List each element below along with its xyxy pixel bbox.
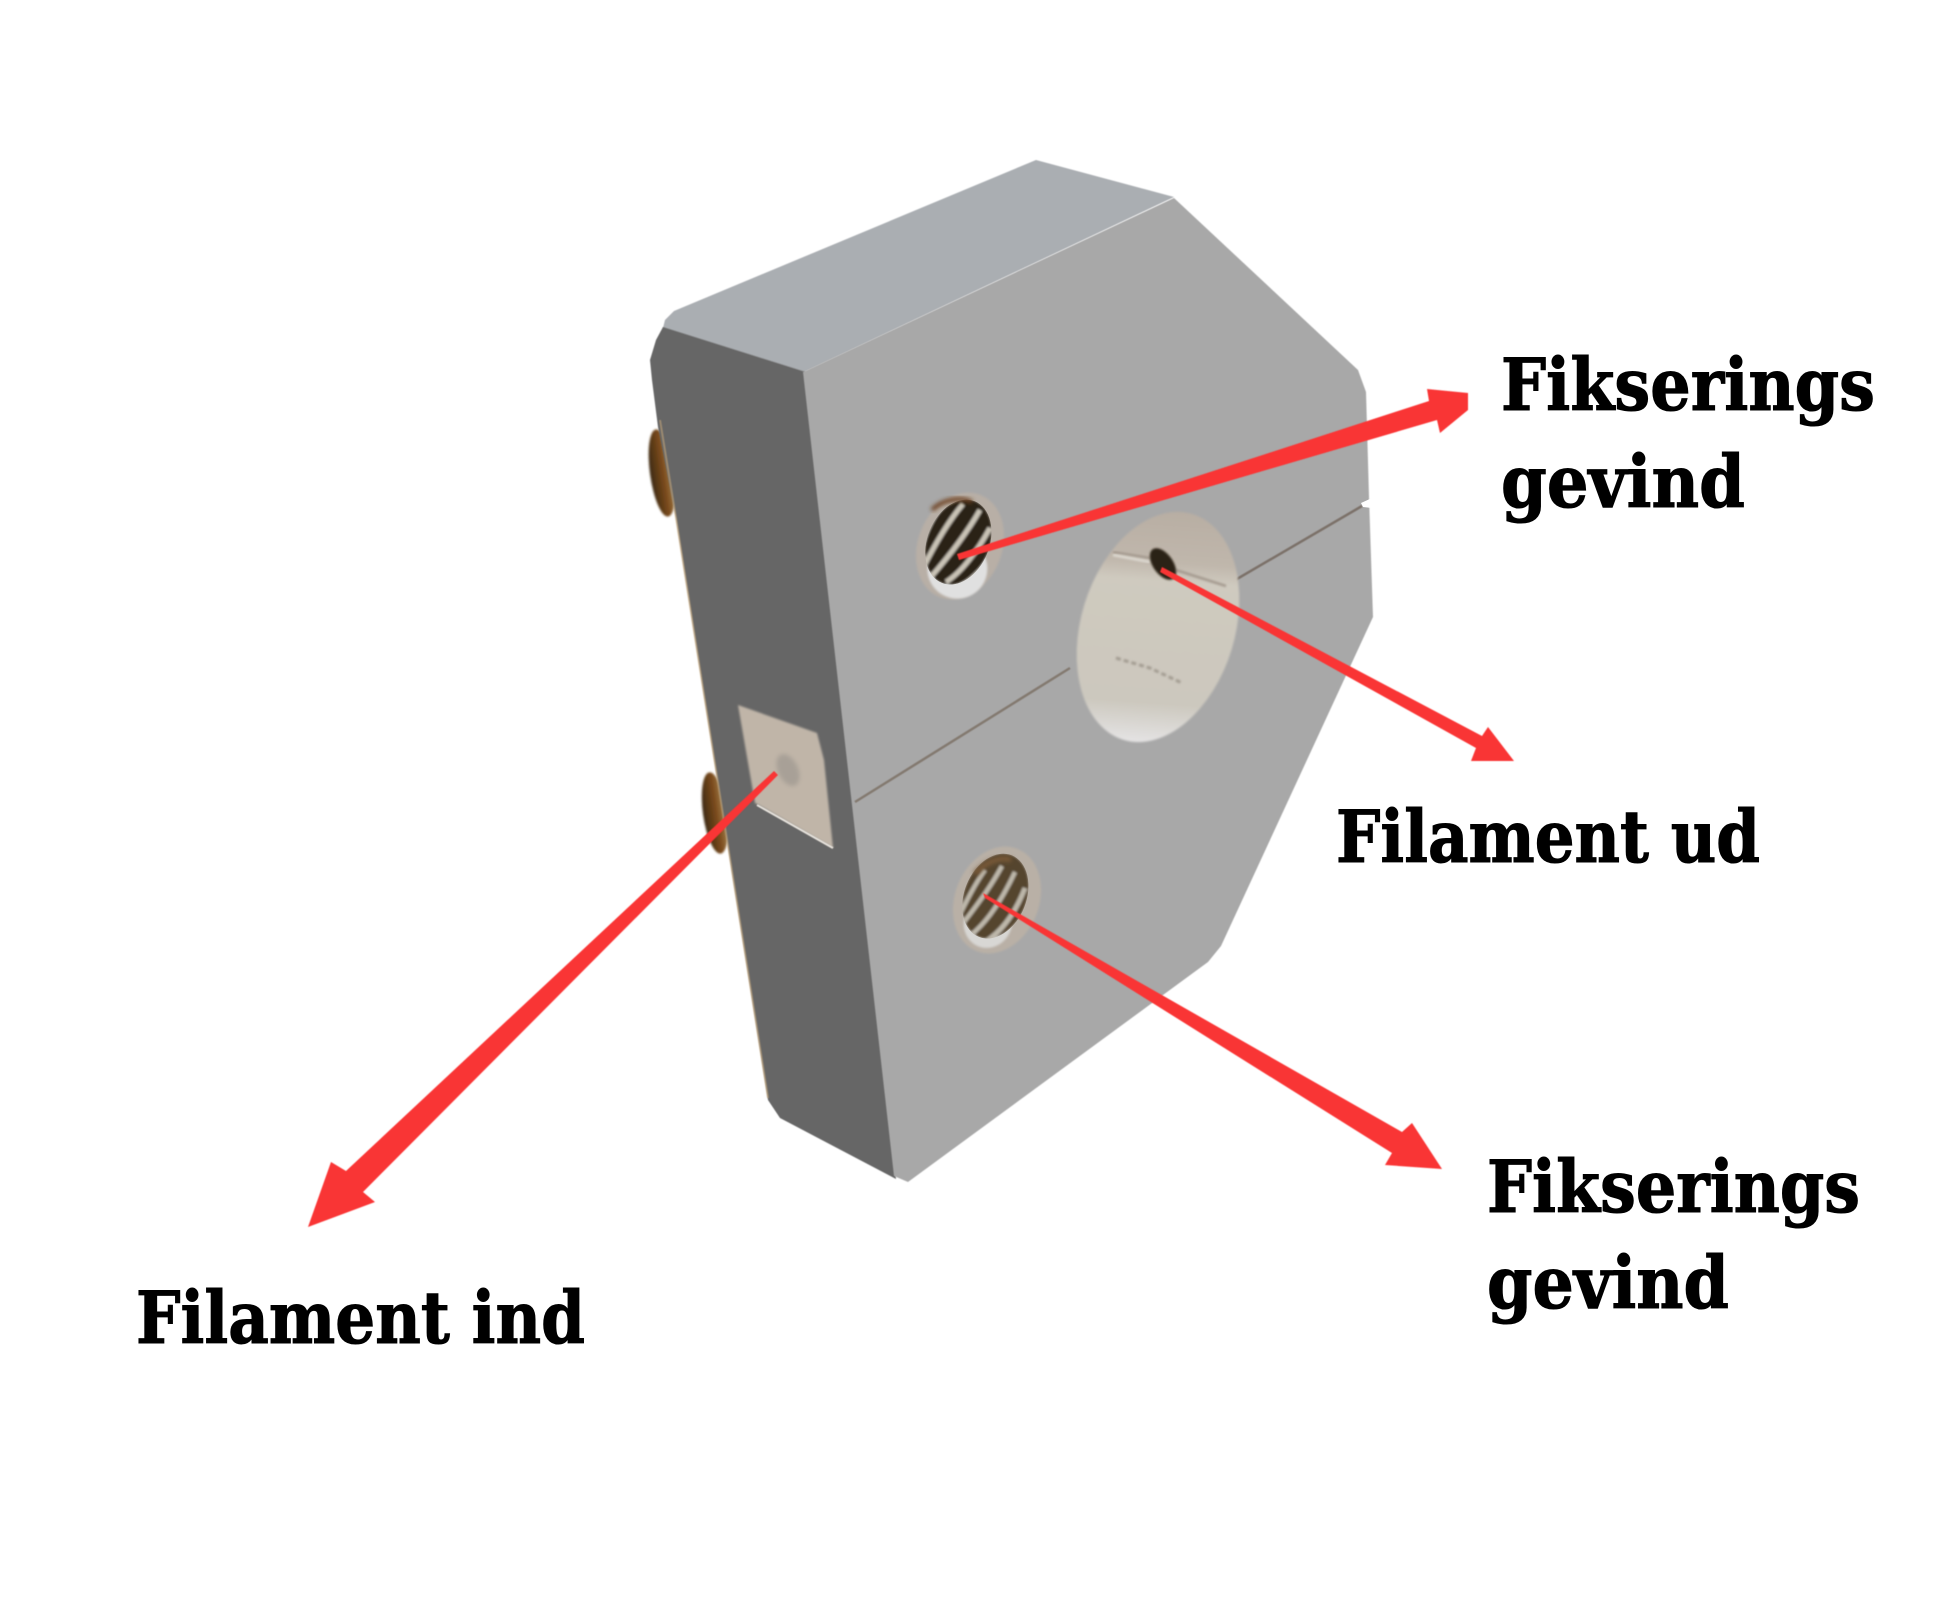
lower threaded hole (953, 846, 1041, 954)
bolt: upper rear (644, 428, 680, 518)
tan fringe on left edge (660, 420, 768, 1098)
central bore (1050, 492, 1266, 762)
arrow: upper fixing thread (957, 389, 1468, 560)
notch (1361, 498, 1372, 508)
label: filament in: Filament ind (136, 1275, 585, 1360)
filament outlet (1144, 544, 1182, 584)
diagram: labelled metal block (138, 160, 1873, 1344)
arrow: filament in (308, 771, 778, 1227)
label: upper fixing thread: Fikserings (1501, 342, 1875, 427)
label: upper fixing thread: gevind (1501, 439, 1745, 524)
label: filament out: Filament ud (1336, 794, 1760, 879)
label: lower fixing thread (1487, 1144, 1860, 1325)
arrow: filament out (1160, 567, 1514, 761)
upper threaded hole (916, 492, 1004, 600)
arrow: lower fixing thread (983, 893, 1442, 1169)
upper slit (1225, 506, 1362, 586)
front face (803, 198, 1373, 1182)
left side face (650, 327, 896, 1179)
top face (663, 160, 1174, 372)
label: upper fixing thread (1501, 342, 1875, 524)
label: lower fixing thread: Fikserings (1487, 1144, 1860, 1229)
block: metal part (644, 160, 1373, 1182)
filament inlet square (738, 705, 833, 848)
label: lower fixing thread: gevind (1487, 1240, 1729, 1325)
bolt: lower rear (697, 771, 733, 855)
lower slit (855, 668, 1070, 802)
